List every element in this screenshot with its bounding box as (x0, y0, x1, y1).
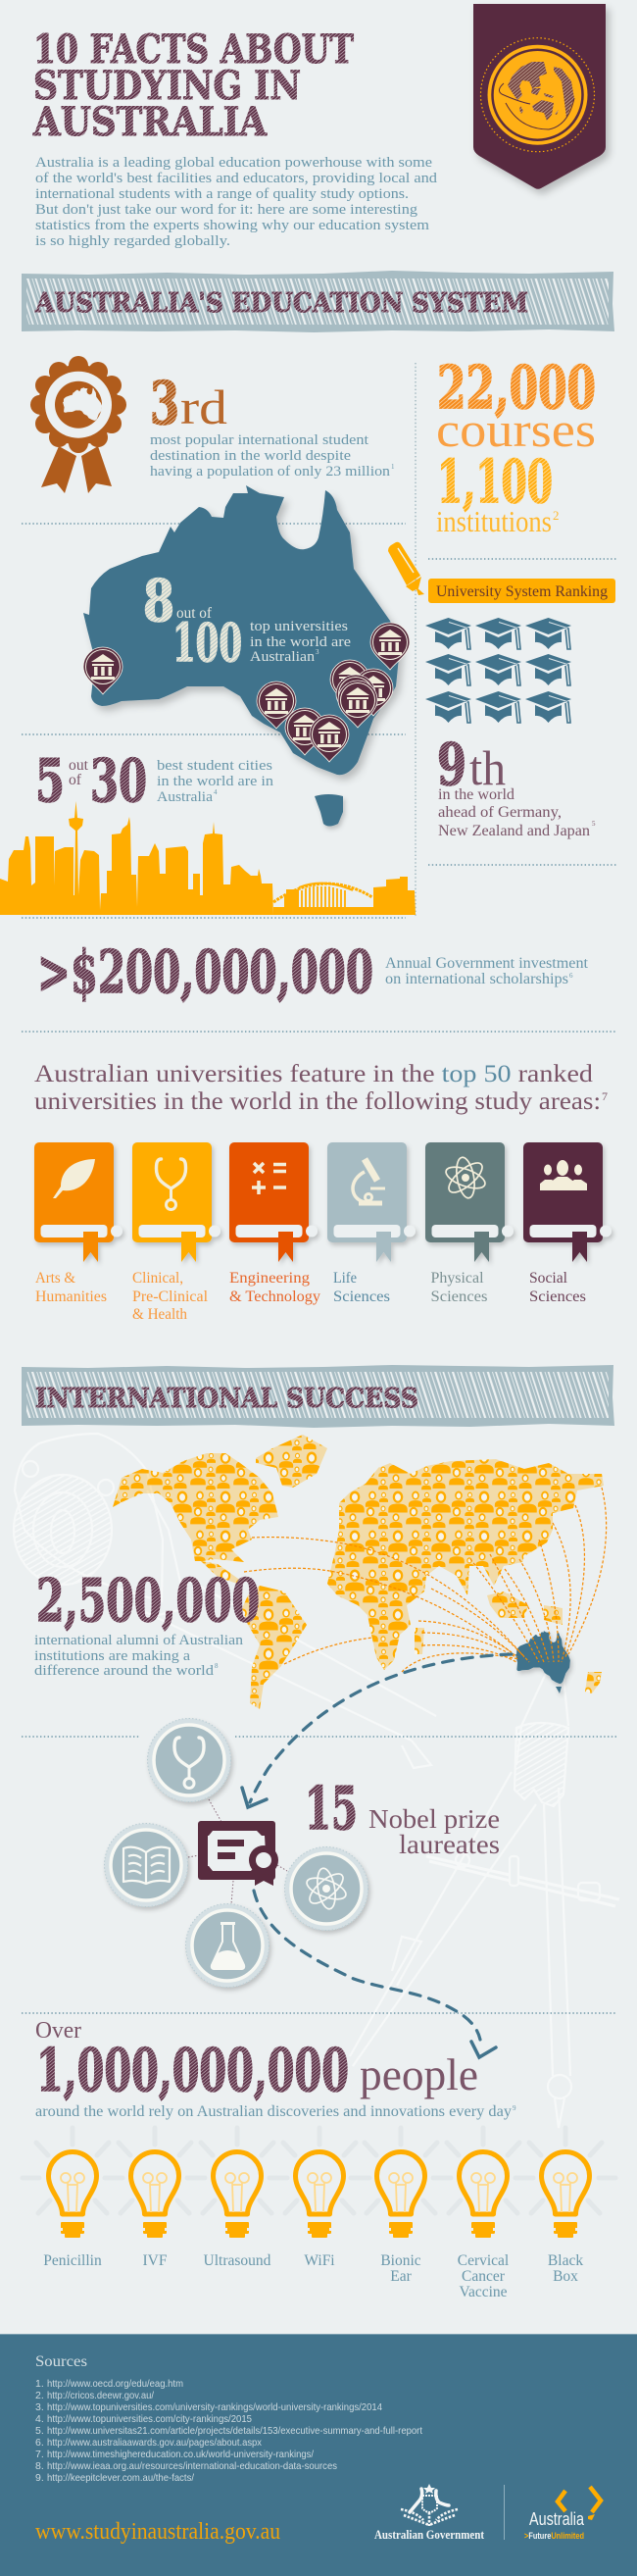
book: social sciences: Sciences (529, 1288, 586, 1305)
sources list: 1. (35, 2378, 44, 2390)
bulb labels: Ultrasound (204, 2252, 271, 2269)
small Australia (515, 1631, 570, 1693)
section banner: education system (22, 271, 614, 332)
stat: one billion people: Over (35, 2018, 81, 2044)
bulb labels: Cervical (458, 2252, 509, 2269)
book: arts and humanities: Arts & (35, 1270, 75, 1287)
book: arts and humanities (34, 1142, 122, 1305)
sources list: http://www.timeshighereducation.co.uk/world-university-rankings/ (47, 2449, 314, 2460)
fact: 5 out of 30: 30 (90, 747, 147, 816)
stat: 2,500,000 alumni: 2,500,000 (36, 1567, 260, 1636)
government wordmark: Australian Government (374, 2527, 485, 2542)
stat: 8 out of 100 (143, 567, 351, 674)
background sketch: drawing instruments (14, 1434, 619, 2128)
book: engineering and technology: Engineering (229, 1270, 310, 1287)
book: life sciences: Sciences (333, 1288, 390, 1305)
fact: 5 out of 30: best student cities (157, 758, 272, 774)
book: engineering and technology: & Technology (229, 1288, 320, 1305)
fact: 9th (437, 731, 596, 839)
heading: top 50 study areas: Australian universities feature in the top 50 ranked (34, 1061, 594, 1087)
bulb labels: Box (553, 2268, 578, 2285)
world map made of alumni figures (113, 1435, 607, 1709)
fact: 22,000 courses, 1,100 institutions: courses (436, 402, 596, 457)
sources list (35, 2378, 422, 2484)
stat: 8 out of 100: 3 (316, 648, 319, 656)
book: physical sciences (425, 1142, 514, 1305)
fact: 5 out of 30: 5 (35, 747, 65, 816)
intro text: of the world's best facilities and educators, providing local and (35, 171, 438, 186)
fact: 3rd: 1 (391, 463, 395, 471)
fact: scholarship investment: Annual Government investment (385, 955, 589, 972)
stat: 2,500,000 alumni (34, 1567, 260, 1679)
dashed arrow: laureates to people (254, 1891, 496, 2057)
footer panel (0, 2334, 637, 2576)
graduation caps grid (425, 618, 571, 723)
fact: scholarship investment: on international scholarships (385, 971, 568, 987)
rosette icon (30, 356, 126, 493)
sources list: 8. (35, 2460, 44, 2472)
sources list: 9. (35, 2472, 44, 2484)
sources heading: Sources (35, 2353, 87, 2370)
fact: 5 out of 30 (35, 747, 274, 816)
sources list: 6. (35, 2437, 44, 2449)
stat: 2,500,000 alumni: 8 (215, 1662, 219, 1670)
fact: 9th: 9 (437, 731, 466, 798)
label: university system ranking (428, 579, 615, 603)
heading: top 50 study areas (34, 1061, 608, 1115)
stat: 2,500,000 alumni: international alumni of Australian (34, 1633, 244, 1648)
discipline circle: medicine (147, 1718, 231, 1802)
stat: 2,500,000 alumni: difference around the world (34, 1663, 215, 1679)
fact: 22,000 courses, 1,100 institutions (436, 354, 596, 538)
section banner: education system: AUSTRALIA'S EDUCATION SYSTEM (34, 288, 528, 319)
fact: 5 out of 30: 4 (214, 788, 218, 796)
fact: 5 out of 30: of (69, 772, 82, 788)
fact: scholarship investment: 6 (569, 972, 573, 980)
Australia Future Unlimited logo: Australia (529, 2509, 585, 2529)
fact: 5 out of 30: Australia (157, 789, 213, 805)
stat: 2,500,000 alumni: institutions are making a (34, 1648, 190, 1664)
section banner: international success: INTERNATIONAL SUCCESS (35, 1384, 418, 1414)
intro text: Australia is a leading global education powerhouse with some (35, 155, 432, 171)
fact: 3rd (150, 370, 395, 480)
title: 10 FACTS ABOUT (33, 26, 354, 73)
sources list: http://www.australiaawards.gov.au/pages/about.aspx (47, 2437, 263, 2449)
stat: 8 out of 100: in the world are (250, 634, 351, 650)
fact: scholarship investment: >$200,000,000 (37, 938, 373, 1007)
book: social sciences: Social (529, 1270, 567, 1287)
book: clinical, pre-clinical and health: Pre-Clinical (132, 1288, 208, 1305)
discipline circle: atom (284, 1847, 368, 1930)
section banner: international success (22, 1365, 614, 1428)
intro text: statistics from the experts showing why our education system (35, 218, 429, 233)
intro text (35, 155, 438, 249)
fact: 5 out of 30: out (69, 757, 89, 774)
sources list: http://cricos.deewr.gov.au/ (47, 2390, 154, 2401)
fact: 3rd: 3 (150, 370, 179, 438)
fact: 9th: th (469, 740, 506, 795)
bulb labels: Ear (390, 2268, 413, 2285)
university pins (83, 623, 410, 762)
book: clinical, pre-clinical and health: Clinical, (132, 1270, 183, 1287)
sources list: 2. (35, 2390, 44, 2401)
intro text: is so highly regarded globally. (35, 233, 230, 249)
bulb labels: IVF (143, 2252, 168, 2269)
title: AUSTRALIA (32, 99, 268, 145)
sources list: http://www.oecd.org/edu/eag.htm (47, 2378, 183, 2390)
book: clinical, pre-clinical and health: & Health (132, 1306, 187, 1323)
stat: 15 Nobel prize laureates (305, 1775, 500, 1859)
discipline circle: flask (186, 1904, 269, 1987)
stat: 15 Nobel prize laureates: 15 (305, 1775, 358, 1844)
sources list: 5. (35, 2425, 44, 2437)
sources list: http://www.topuniversities.com/university-rankings/world-university-rankings/2014 (47, 2401, 382, 2413)
connectors (188, 1799, 287, 1904)
book: physical sciences: Sciences (431, 1288, 488, 1305)
heading: top 50 study areas: universities in the world in the following study areas: (34, 1088, 601, 1115)
bulb labels: WiFi (304, 2252, 335, 2269)
Australia Future Unlimited logo: >FutureUnlimited (524, 2531, 584, 2542)
fact: 3rd: most popular international student (150, 432, 369, 448)
stat: one billion people: 1,000,000,000 (36, 2037, 349, 2105)
fact: 3rd: having a population of only 23 million (150, 464, 391, 480)
stat: 8 out of 100: top universities (250, 619, 348, 634)
highlighter icon (388, 542, 424, 595)
sources list: 4. (35, 2413, 44, 2425)
fact: 22,000 courses, 1,100 institutions: 1,100 (437, 448, 553, 517)
Sydney skyline (0, 801, 416, 915)
bulb labels: Vaccine (459, 2284, 508, 2300)
sources list: http://www.universitas21.com/article/projects/details/153/executive-summary-and-full-report (47, 2425, 422, 2437)
bulb labels: Penicillin (43, 2252, 102, 2269)
sources list: 3. (35, 2401, 44, 2413)
bulb labels: Cancer (462, 2268, 506, 2285)
fact: 9th: 5 (592, 820, 596, 828)
fact: 9th: ahead of Germany, (438, 804, 562, 821)
fact: 22,000 courses, 1,100 institutions: institutions (436, 504, 552, 538)
stat: one billion people: around the world rely on Australian discoveries and innovations every day (35, 2103, 512, 2120)
book: life sciences (327, 1142, 416, 1305)
stat: 8 out of 100: 100 (172, 613, 242, 674)
discipline circle: book (104, 1824, 188, 1906)
stat: 8 out of 100: 8 (143, 567, 174, 634)
sources list: http://www.ieaa.org.au/resources/international-education-data-sources (47, 2460, 337, 2472)
row of light bulbs: discoveries (23, 2128, 615, 2238)
stat: 8 out of 100: out of (176, 605, 213, 622)
dashed arrow: Australia to Nobel laureates (242, 1654, 512, 1807)
website URL: www.studyinaustralia.gov.au (35, 2519, 280, 2545)
stat: 8 out of 100: Australian (250, 649, 316, 665)
intro text: But don't just take our word for it: here are some interesting (35, 202, 418, 218)
book: clinical, pre-clinical and health (132, 1142, 220, 1323)
fact: 5 out of 30: in the world are in (157, 774, 274, 789)
stat: one billion people (35, 2018, 516, 2120)
book: physical sciences: Physical (431, 1270, 484, 1287)
fact: 3rd: destination in the world despite (150, 448, 351, 464)
fact: 9th: in the world (438, 786, 514, 803)
heading: top 50 study areas: 7 (602, 1089, 608, 1103)
sources list: http://keepitclever.com.au/the-facts/ (47, 2472, 194, 2484)
title: STUDYING IN (33, 63, 301, 109)
dividers (22, 363, 616, 2013)
map of Australia with universities (83, 485, 410, 826)
Australian Government crest (374, 2484, 485, 2542)
bulb labels: Bionic (380, 2252, 421, 2269)
stat: 15 Nobel prize laureates: laureates (399, 1830, 500, 1859)
book: engineering and technology (229, 1142, 320, 1305)
badge: ribbon with globe (473, 4, 606, 189)
stat: 15 Nobel prize laureates: Nobel prize (368, 1804, 500, 1834)
alumni connection lines (244, 1488, 607, 1672)
book: arts and humanities: Humanities (35, 1288, 107, 1305)
bulb labels (43, 2252, 583, 2300)
fact: 9th: New Zealand and Japan (438, 823, 590, 839)
title (32, 26, 354, 145)
Australia Future Unlimited logo (524, 2487, 601, 2542)
sources list: 7. (35, 2449, 44, 2460)
stat: one billion people: 9 (513, 2104, 516, 2112)
stat: one billion people: people (360, 2049, 478, 2099)
fact: 3rd: rd (180, 379, 227, 434)
label: university system ranking: University System Ranking (436, 583, 608, 600)
sources list: http://www.topuniversities.com/city-rankings/2015 (47, 2413, 252, 2425)
book: life sciences: Life (333, 1270, 357, 1287)
certificate icon (198, 1821, 278, 1886)
fact: 22,000 courses, 1,100 institutions: 2 (553, 508, 559, 523)
intro text: international students with a range of quality study options. (35, 186, 409, 202)
bulb labels: Black (548, 2252, 583, 2269)
book: social sciences (523, 1142, 612, 1305)
